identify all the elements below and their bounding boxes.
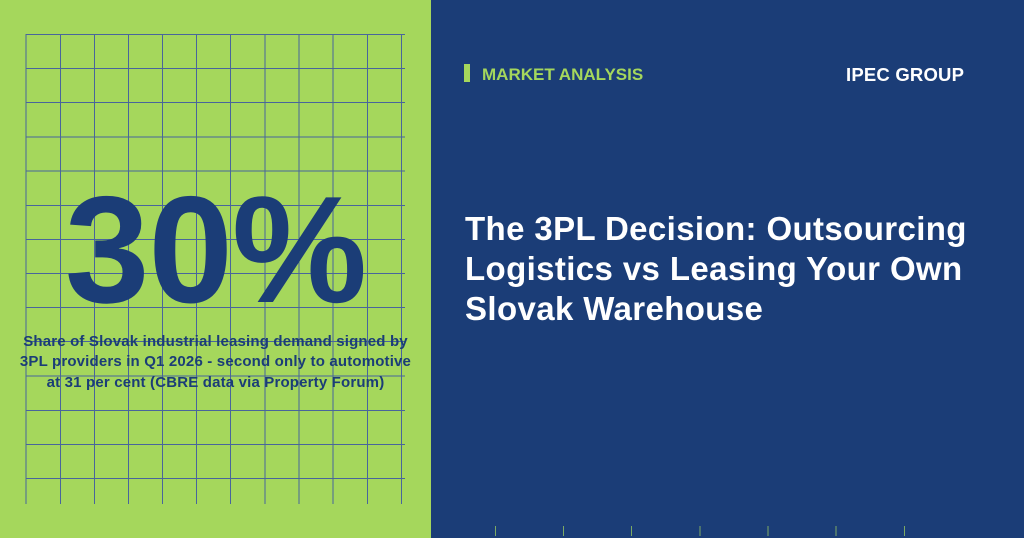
panel: left statistic panel — [0, 0, 431, 538]
statistic caption — [20, 332, 411, 390]
accent bar — [464, 64, 470, 82]
statistic caption: at 31 per cent (CBRE data via Property Forum) — [47, 374, 384, 390]
bottom tick marks — [495, 526, 905, 536]
panel: right title panel — [431, 0, 1024, 538]
big statistic: 30%: 30% — [65, 165, 366, 335]
category label: MARKET ANALYSIS — [482, 65, 643, 84]
brand name: IPEC GROUP — [846, 64, 964, 85]
statistic caption: 3PL providers in Q1 2026 - second only to automotive — [20, 353, 411, 370]
statistic caption: Share of Slovak industrial leasing demand signed by — [23, 332, 408, 350]
grid pattern — [26, 34, 405, 504]
main heading — [465, 210, 967, 327]
main heading: Slovak Warehouse — [465, 290, 763, 327]
main heading: The 3PL Decision: Outsourcing — [465, 210, 967, 247]
main heading: Logistics vs Leasing Your Own — [465, 250, 963, 287]
